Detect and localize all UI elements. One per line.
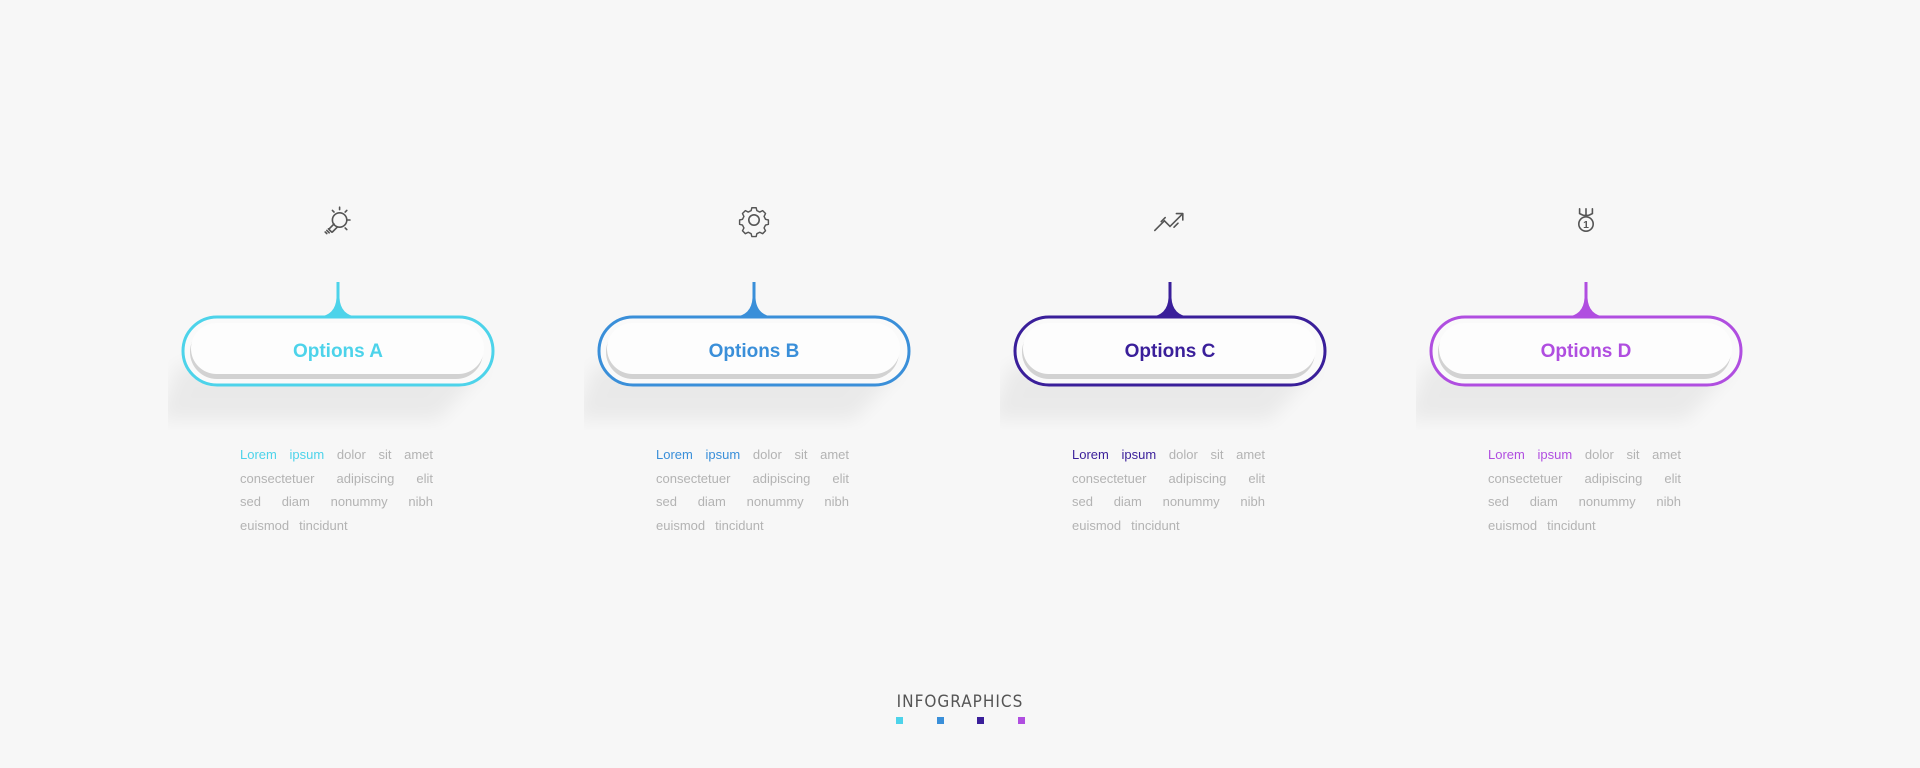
text block C: sit — [1210, 447, 1223, 462]
text block A — [240, 447, 433, 532]
text block C: dolor — [1169, 447, 1198, 462]
text block C — [1072, 447, 1265, 532]
icon: trend arrow — [1154, 212, 1184, 232]
text block C: amet — [1236, 447, 1265, 462]
text block A: elit — [416, 470, 433, 486]
text block C: nonummy — [1163, 494, 1220, 509]
text block B: dolor — [753, 447, 782, 462]
text block D — [1488, 447, 1681, 532]
text block A: Lorem — [240, 447, 277, 462]
icon: medal: 1 — [1583, 220, 1589, 231]
text block B: euismod — [656, 518, 705, 532]
icon: gear — [738, 207, 770, 238]
text block B: ipsum — [706, 447, 740, 462]
icon: light bulb — [324, 206, 351, 234]
text block A: diam — [282, 494, 310, 509]
text block D: tincidunt — [1547, 518, 1596, 532]
text block D: consectetuer — [1488, 470, 1562, 486]
text block D: Lorem — [1488, 447, 1525, 462]
text block D: sit — [1626, 447, 1639, 462]
text block C: adipiscing — [1168, 470, 1226, 486]
text block B: adipiscing — [752, 470, 810, 486]
text block A: adipiscing — [336, 470, 394, 486]
text block B: sit — [794, 447, 807, 462]
text block D: dolor — [1585, 447, 1614, 462]
text block C: sed — [1072, 494, 1093, 509]
text block B: elit — [832, 470, 849, 486]
text block B: amet — [820, 447, 849, 462]
footer: INFOGRAPHICS label with color squares: INFOGRAPHICS — [897, 692, 1023, 712]
text block D: nibh — [1656, 494, 1681, 509]
footer: INFOGRAPHICS label with color squares — [896, 692, 1025, 724]
text block C: nibh — [1240, 494, 1265, 509]
pill: Options D: Options D — [1541, 341, 1631, 362]
text block D: elit — [1664, 470, 1681, 486]
text block B: tincidunt — [715, 518, 764, 532]
text block A: sed — [240, 494, 261, 509]
text block A: euismod — [240, 518, 289, 532]
text block D: diam — [1530, 494, 1558, 509]
text block B: sed — [656, 494, 677, 509]
text block A: dolor — [337, 447, 366, 462]
text block A: ipsum — [290, 447, 324, 462]
text block A: nibh — [408, 494, 433, 509]
pill: Options A — [168, 282, 494, 416]
text block C: diam — [1114, 494, 1142, 509]
icon: medal — [1578, 208, 1594, 232]
text block A: amet — [404, 447, 433, 462]
text block D: ipsum — [1538, 447, 1572, 462]
text block D: nonummy — [1579, 494, 1636, 509]
text block B: consectetuer — [656, 470, 730, 486]
text block C: Lorem — [1072, 447, 1109, 462]
text block B: nibh — [824, 494, 849, 509]
text block A: nonummy — [331, 494, 388, 509]
text block D: amet — [1652, 447, 1681, 462]
option D — [1416, 208, 1742, 532]
text block A: tincidunt — [299, 518, 348, 532]
text block C: tincidunt — [1131, 518, 1180, 532]
pill: Options D — [1416, 282, 1742, 416]
text block B — [656, 447, 849, 532]
text block A: sit — [378, 447, 391, 462]
pill: Options B: Options B — [709, 341, 799, 362]
option A — [168, 206, 494, 532]
text block B: Lorem — [656, 447, 693, 462]
option C — [1000, 212, 1326, 532]
pill: Options A: Options A — [293, 341, 383, 362]
text block B: nonummy — [747, 494, 804, 509]
text block D: euismod — [1488, 518, 1537, 532]
text block A: consectetuer — [240, 470, 314, 486]
text block C: ipsum — [1122, 447, 1156, 462]
text block C: elit — [1248, 470, 1265, 486]
pill: Options C: Options C — [1125, 341, 1216, 362]
pill: Options C — [1000, 282, 1326, 416]
pill: Options B — [584, 282, 910, 416]
text block C: euismod — [1072, 518, 1121, 532]
text block D: sed — [1488, 494, 1509, 509]
text block B: diam — [698, 494, 726, 509]
option B — [584, 207, 910, 532]
text block D: adipiscing — [1584, 470, 1642, 486]
text block C: consectetuer — [1072, 470, 1146, 486]
